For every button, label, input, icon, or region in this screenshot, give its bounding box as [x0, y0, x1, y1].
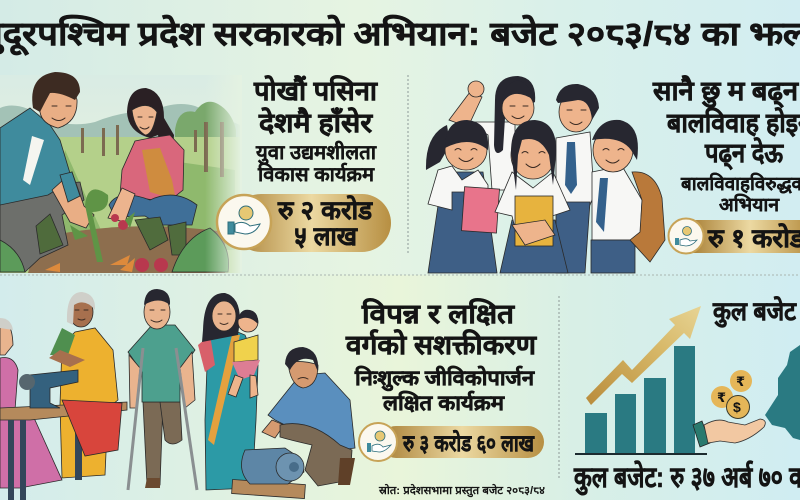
map of Nepal region [765, 345, 800, 440]
sewing machine and table [0, 402, 127, 420]
title: सुदूरपश्चिम प्रदेश सरकारको अभियान: बजेट २०८३/८४ का झलक [0, 14, 800, 56]
heading: पढ्न देऊ [704, 137, 785, 170]
icon: coin in hand [675, 226, 697, 246]
left girl [426, 125, 450, 170]
woman in yellow sari [60, 328, 118, 478]
arrow: growth [586, 306, 701, 405]
source note: स्रोत: प्रदेशसभामा प्रस्तुत बजेट २०८३/८४ [378, 483, 545, 498]
panel: empowerment of poor and target groups [0, 289, 545, 500]
seamstress [0, 358, 62, 488]
heading [253, 75, 378, 138]
programme name: निःशुल्क जीविकोपार्जन [354, 365, 535, 392]
tall boy [556, 132, 594, 205]
budget pill: रु २ करोड [277, 195, 373, 225]
budget pill: रु ३ करोड ६० लाख [402, 429, 535, 456]
mechanic with motor [268, 373, 355, 452]
man [0, 182, 84, 272]
illustration: farming couple [0, 72, 242, 273]
budget pill [668, 218, 800, 254]
icon: coins: $ [733, 399, 741, 415]
budget pill: ५ लाख [294, 221, 359, 251]
illustration: school children [426, 76, 665, 273]
icon: coin in hand [367, 431, 391, 452]
mother and child [205, 328, 258, 490]
icon: open hand [693, 419, 765, 447]
budget pill [217, 194, 391, 252]
budget pill [359, 423, 544, 461]
panel: child marriage campaign [426, 75, 800, 273]
centre girl [500, 220, 568, 273]
panel: total budget [573, 296, 800, 496]
back girl with raised arm [449, 92, 482, 127]
icon: coin in hand [228, 206, 260, 234]
programme name: युवा उद्यमशीलता [255, 140, 377, 165]
vegetables [0, 189, 229, 272]
heading: देशमै हाँसेर [258, 107, 373, 138]
programme name [354, 365, 535, 415]
woman [127, 88, 174, 160]
icon: coins: ₹ [717, 390, 726, 405]
heading: सानै छु म बढ्न [652, 75, 799, 108]
panel: youth entrepreneurship [0, 72, 391, 273]
heading: वर्गको सशक्तीकरण [345, 329, 538, 360]
heading: विपन्न र लक्षित [361, 298, 516, 329]
icon: coins [711, 370, 752, 418]
programme name [255, 140, 377, 186]
right boy [592, 166, 642, 240]
programme name: लक्षित कार्यक्रम [382, 390, 506, 415]
man on crutches [143, 402, 163, 485]
heading [652, 75, 800, 170]
programme name [680, 172, 800, 216]
heading: पोखौं पसिना [253, 75, 378, 106]
illustration: livelihood beneficiaries [0, 289, 355, 500]
programme name: विकास कार्यक्रम [257, 162, 375, 186]
bar chart [575, 346, 707, 455]
budget pill: रु १ करोड [707, 223, 800, 253]
icon: coins: ₹ [736, 374, 745, 389]
heading [345, 298, 538, 360]
programme name: अभियान [719, 193, 780, 216]
